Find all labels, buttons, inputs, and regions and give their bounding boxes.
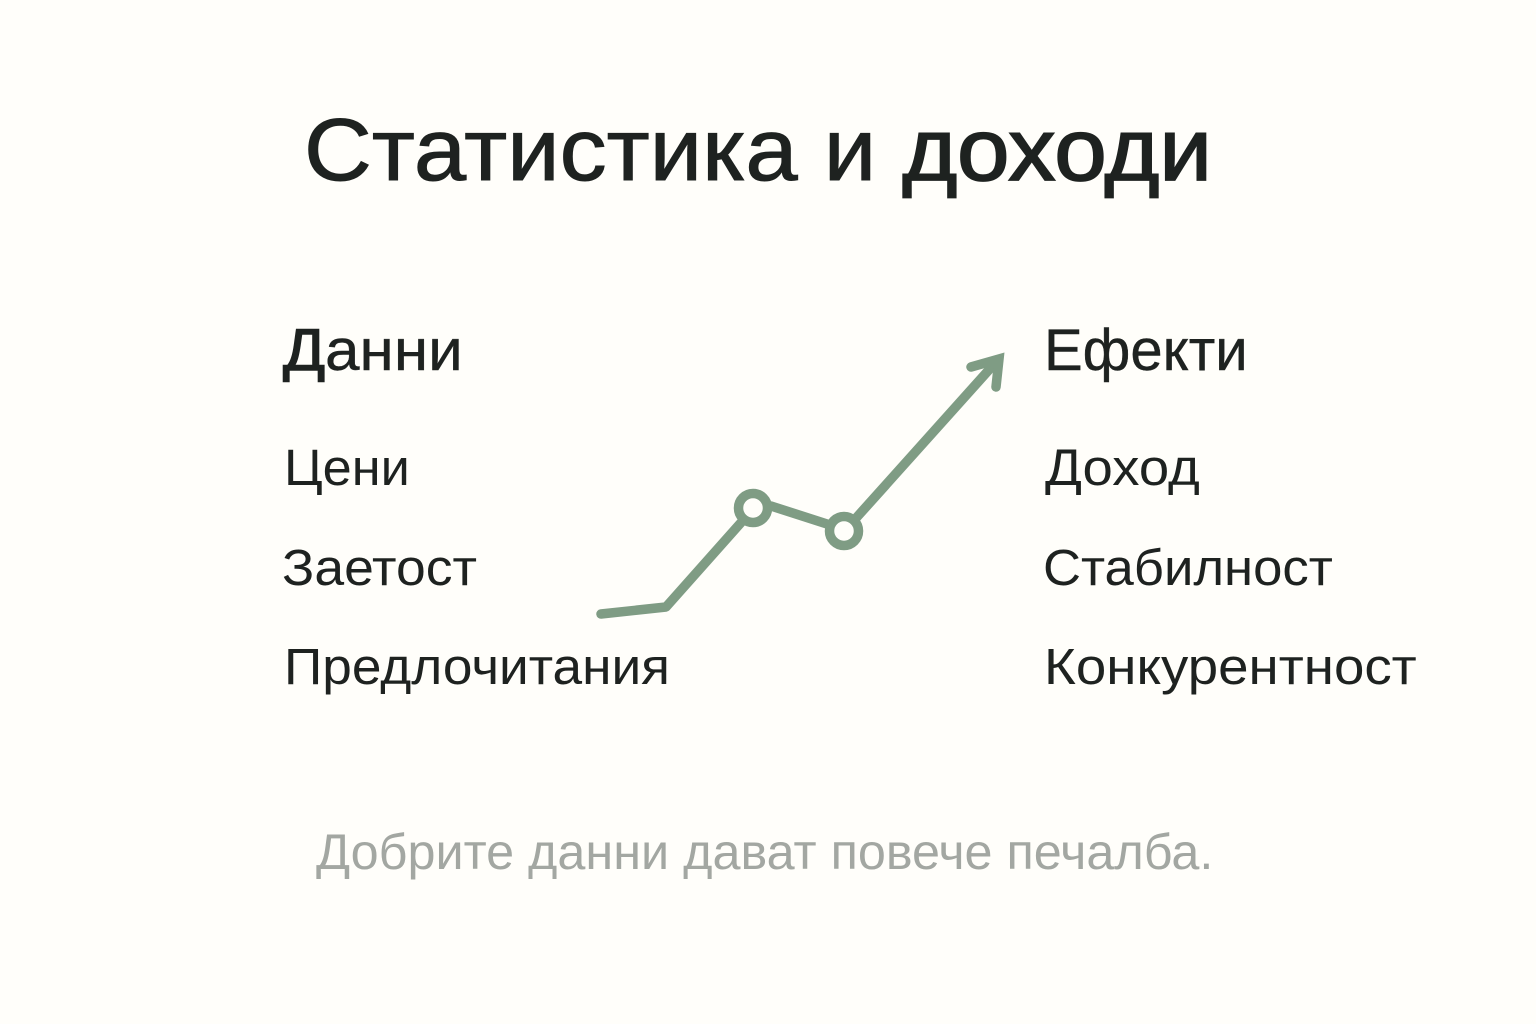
item: competitiveness: Конкурентност [1044,638,1417,695]
item: stability: Стабилност [1043,539,1333,596]
item: income: Доход [1045,439,1200,496]
heading: data: Данни [283,318,463,383]
item: prices: Цени [284,439,410,496]
item: occupancy: Заетост [282,539,477,596]
title: Статистика и доходи [304,100,1212,199]
item: preferences: Предлочитания [284,638,670,695]
heading: effects: Ефекти [1044,318,1248,383]
footer caption: Добрите данни дават повече печалба. [316,824,1213,880]
